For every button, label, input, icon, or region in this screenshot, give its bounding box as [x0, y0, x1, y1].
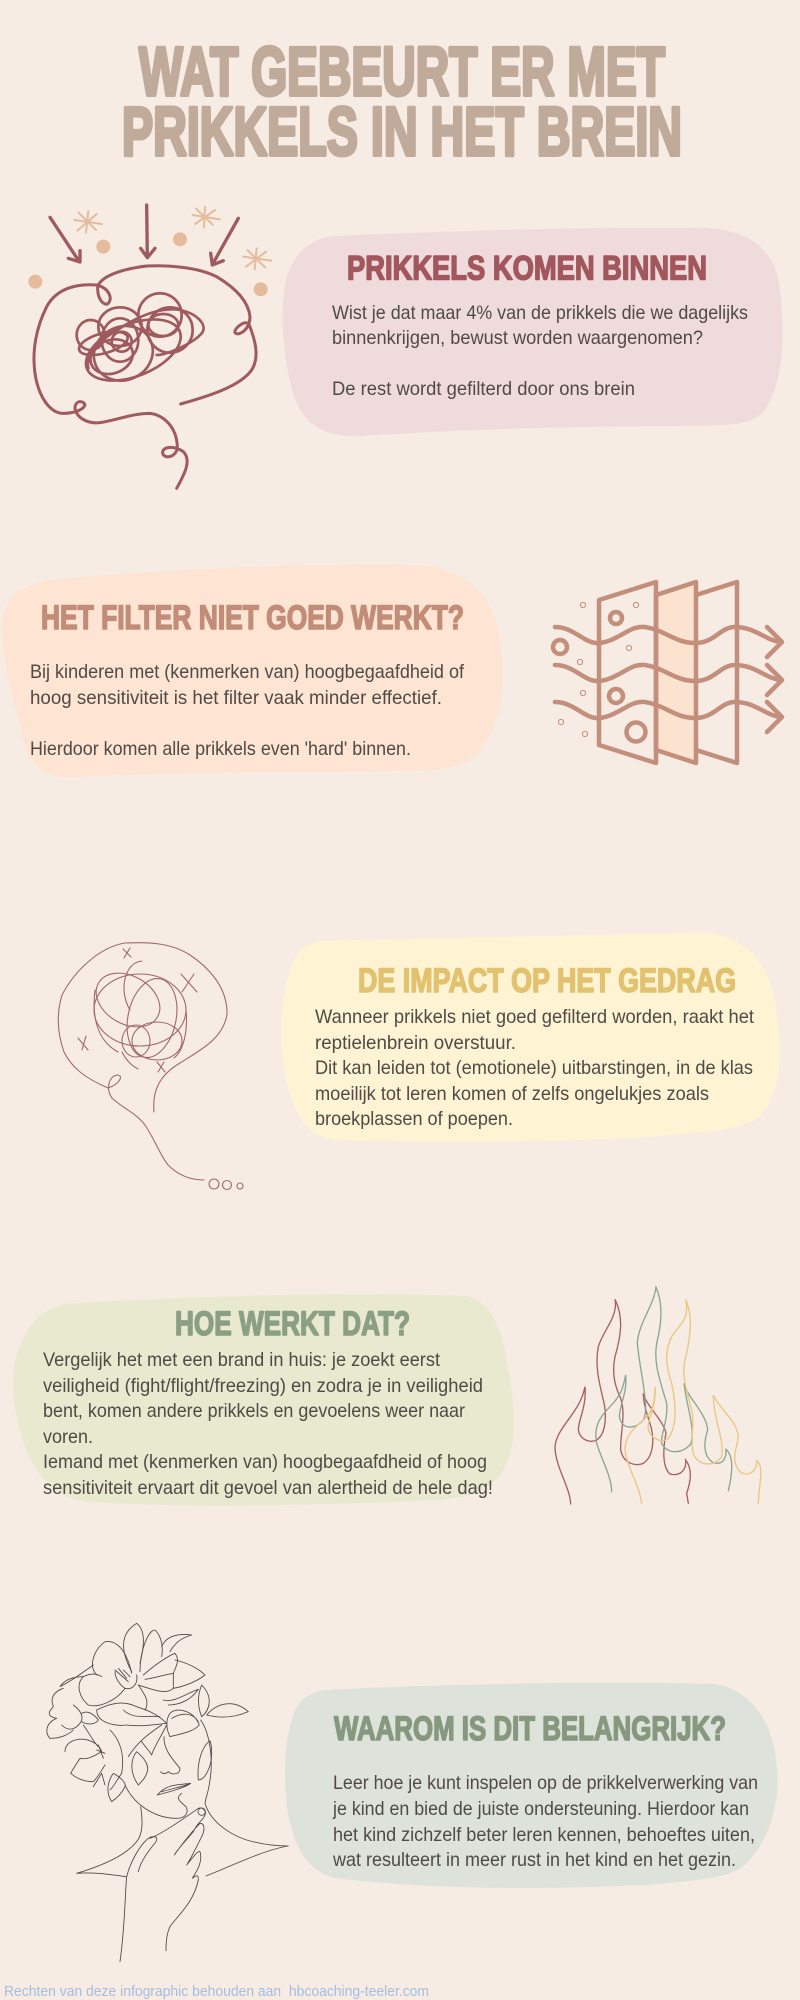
text block: moeilijk tot leren komen of zelfs ongelukjes zoals	[315, 1083, 709, 1105]
hand	[120, 1808, 205, 1962]
heading: PRIKKELS KOMEN BINNEN	[347, 250, 707, 288]
title	[122, 33, 682, 170]
text block: voren.	[43, 1426, 93, 1448]
crosses	[78, 948, 197, 1072]
text block: binnenkrijgen, bewust worden waargenomen?	[332, 327, 703, 349]
text block: sensitiviteit ervaart dit gevoel van alertheid de hele dag!	[43, 1477, 493, 1499]
text block: Hierdoor komen alle prikkels even 'hard' binnen.	[30, 738, 411, 760]
text block: Iemand met (kenmerken van) hoogbegaafdheid of hoog	[43, 1451, 487, 1473]
panel: de impact op het gedrag	[281, 933, 780, 1142]
text block: je kind en bied de juiste ondersteuning. Hierdoor kan	[332, 1798, 749, 1820]
flowers	[93, 1641, 132, 1675]
text block	[315, 1006, 755, 1130]
text block: De rest wordt gefilterd door ons brein	[332, 378, 635, 400]
text block	[43, 1349, 493, 1499]
scribble	[94, 974, 186, 1046]
heading: HET FILTER NIET GOED WERKT?	[41, 599, 464, 637]
text block: Vergelijk het met een brand in huis: je zoekt eerst	[43, 1349, 441, 1371]
text block: Bij kinderen met (kenmerken van) hoogbegaafdheid of	[30, 661, 465, 683]
arrows pointing into the brain	[50, 205, 238, 265]
panel: waarom is dit belangrijk	[285, 1683, 778, 1888]
text block	[332, 1772, 758, 1871]
panel: het filter niet goed werkt	[2, 565, 503, 777]
panel: hoe werkt dat	[13, 1294, 514, 1505]
icon: line-art flames	[555, 1287, 761, 1504]
icon: tangled brain with incoming arrows	[28, 205, 271, 488]
text block: Wist je dat maar 4% van de prikkels die we dagelijks	[332, 302, 748, 324]
text block: bent, komen andere prikkels en gevoelens weer naar	[43, 1400, 465, 1422]
text block	[30, 661, 465, 760]
icon: thought balloon with scribble	[58, 943, 243, 1190]
text block: Wanneer prikkels niet goed gefilterd worden, raakt het	[315, 1006, 755, 1028]
text block: Leer hoe je kunt inspelen op de prikkelverwerking van	[333, 1772, 758, 1794]
text block: broekplassen of poepen.	[315, 1108, 513, 1130]
heading: HOE WERKT DAT?	[175, 1305, 410, 1343]
text block: wat resulteert in meer rust in het kind en het gezin.	[332, 1849, 736, 1871]
brain outline	[34, 266, 256, 488]
text block: het kind zichzelf beter leren kennen, behoeftes uiten,	[333, 1824, 755, 1846]
text block: Dit kan leiden tot (emotionele) uitbarstingen, in de klas	[315, 1057, 753, 1079]
panel: prikkels komen binnen	[283, 228, 783, 436]
text block: hoog sensitiviteit is het filter vaak minder effectief.	[30, 687, 442, 709]
sparkles and dots	[28, 207, 271, 296]
text block: veiligheid (fight/flight/freezing) en zodra je in veiligheid	[43, 1375, 483, 1397]
icon: filter layers with waves	[553, 582, 782, 763]
text block	[332, 302, 748, 400]
tangle	[77, 293, 204, 393]
icon: line-art face with flowers	[47, 1623, 288, 1962]
footer credit: Rechten van deze infographic behouden aan hbcoaching-teeler.com	[4, 1984, 429, 2000]
face and neck	[125, 1785, 187, 1818]
text block: reptielenbrein overstuur.	[315, 1032, 516, 1054]
